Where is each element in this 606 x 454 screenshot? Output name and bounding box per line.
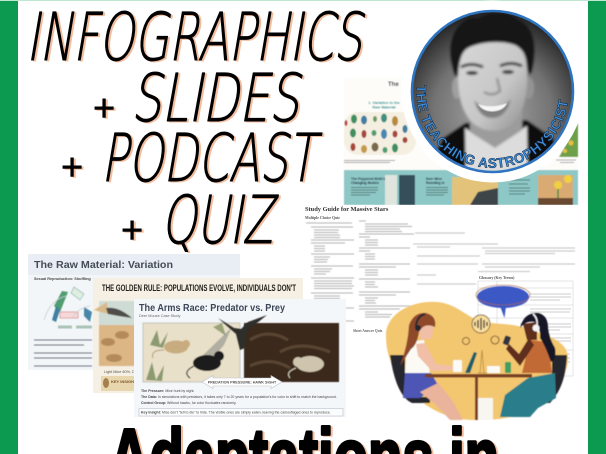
jacket <box>436 118 555 166</box>
glossary table <box>478 281 573 376</box>
key insight banner <box>101 376 137 391</box>
right person <box>500 313 556 417</box>
illustration: podcast scene <box>386 285 568 420</box>
icon: sound wave circle <box>472 315 490 333</box>
heading: plus slides: SLIDES <box>131 60 303 137</box>
slide title: The Raw Material: Variation <box>34 259 173 271</box>
panel: beetle infographic thumbnail: Raw Material <box>372 106 396 110</box>
photo badge: the teaching astrophysicist <box>404 0 578 182</box>
predation pressure arrow banner: PREDATION PRESSURE: HAWK SIGHT <box>208 380 277 384</box>
teal band: Roosting in <box>426 181 445 185</box>
slide title: THE GOLDEN RULE: POPULATIONS EVOLVE, INDIVIDUALS DON'T <box>102 283 296 293</box>
beetle card heading: The <box>388 82 399 88</box>
symbol: plus three: + <box>121 210 143 252</box>
predation pressure arrow banner <box>202 376 282 388</box>
top green edge <box>0 0 606 1</box>
symbol: plus two: + <box>61 147 83 189</box>
hair <box>450 13 535 76</box>
panel: raw material variation slide <box>28 254 240 370</box>
curved badge text: THE TEACHING ASTROPHYSICIST <box>416 85 568 168</box>
key insight box: Key Insight: Mice don't "tell to die" to hide. The visible ones are simply eaten, leaving the camouflaged ones to reproduce. <box>141 410 331 414</box>
table with devices <box>425 350 532 420</box>
yellow blob <box>386 302 568 420</box>
portrait <box>413 12 572 171</box>
slide body text: The Pressure: Mice hunt by sight. <box>141 389 195 393</box>
beetle caption lines <box>344 160 395 162</box>
ears <box>452 77 462 99</box>
symbol: plus one: + <box>93 88 115 130</box>
teal band <box>344 170 578 205</box>
slide title: The Arms Race: Predator vs. Prey <box>139 303 285 314</box>
neck <box>470 110 522 148</box>
title stack: infographics, slides, podcast, quiz <box>26 0 365 259</box>
left chair <box>390 355 430 403</box>
variation diagram <box>44 287 92 327</box>
teal band: Deer Mice <box>426 177 442 181</box>
first question column <box>306 223 354 334</box>
subheading: Sexual Reproduction: Shuffling <box>34 277 91 281</box>
panel: beetle infographic thumbnail <box>344 78 578 205</box>
speech bubble <box>476 285 530 318</box>
panel: study guide document <box>303 205 578 376</box>
teal band: The Peppered Moth's <box>351 177 385 181</box>
study guide heading: Study Guide for Massive Stars <box>305 206 389 213</box>
icon: small circle two <box>491 336 499 344</box>
light environment scene <box>143 323 240 382</box>
right green border <box>588 0 606 454</box>
left person <box>400 313 463 420</box>
key insight box <box>139 408 343 416</box>
dark environment scene <box>244 323 339 382</box>
beetle grid <box>344 112 416 155</box>
blue ring <box>412 11 573 172</box>
smile <box>478 103 507 112</box>
section label: variation: 1. Variation in the <box>368 101 400 105</box>
heading: plus podcast: PODCAST <box>101 120 322 197</box>
heading: plus quiz: QUIZ <box>161 182 279 259</box>
teal band: Changing Bodies <box>351 181 379 185</box>
right chair <box>527 355 567 403</box>
short answer block: Short Answer Quiz <box>353 329 383 333</box>
body text lines <box>34 340 92 366</box>
slide subtitle: Deer Mouse Case Study <box>139 314 180 318</box>
shirt <box>465 126 528 182</box>
multiple choice heading: Multiple Choice Quiz <box>305 216 340 220</box>
brows <box>461 64 522 67</box>
mice caption: Light Mice 80%, Dark <box>104 370 140 374</box>
panel: golden rule slide <box>93 278 303 393</box>
left green border <box>0 0 18 454</box>
smile shading <box>474 99 511 118</box>
icon: small circle one <box>462 338 470 344</box>
face <box>458 40 527 131</box>
sandy mice scene <box>94 301 135 366</box>
hawk silhouette <box>218 315 267 350</box>
second question column <box>359 221 414 317</box>
slide body text <box>141 389 337 405</box>
third question column <box>413 233 575 284</box>
green plant corner <box>556 123 578 162</box>
key insight banner: KEY INSIGHT <box>111 379 137 384</box>
glossary heading: Glossary (Key Terms) <box>479 276 515 280</box>
slide body text: The Data: In simulations with predators, it takes only 7 to 20 years for a population's fur color to shift to match the background. <box>141 395 337 399</box>
heading: infographics: INFOGRAPHICS <box>26 0 365 76</box>
slide body text: Control Group: Without hawks, fur color fluctuates randomly. <box>141 401 236 405</box>
nose shade <box>484 78 500 94</box>
panel: arms race slide <box>134 299 346 417</box>
eyes <box>466 71 478 75</box>
